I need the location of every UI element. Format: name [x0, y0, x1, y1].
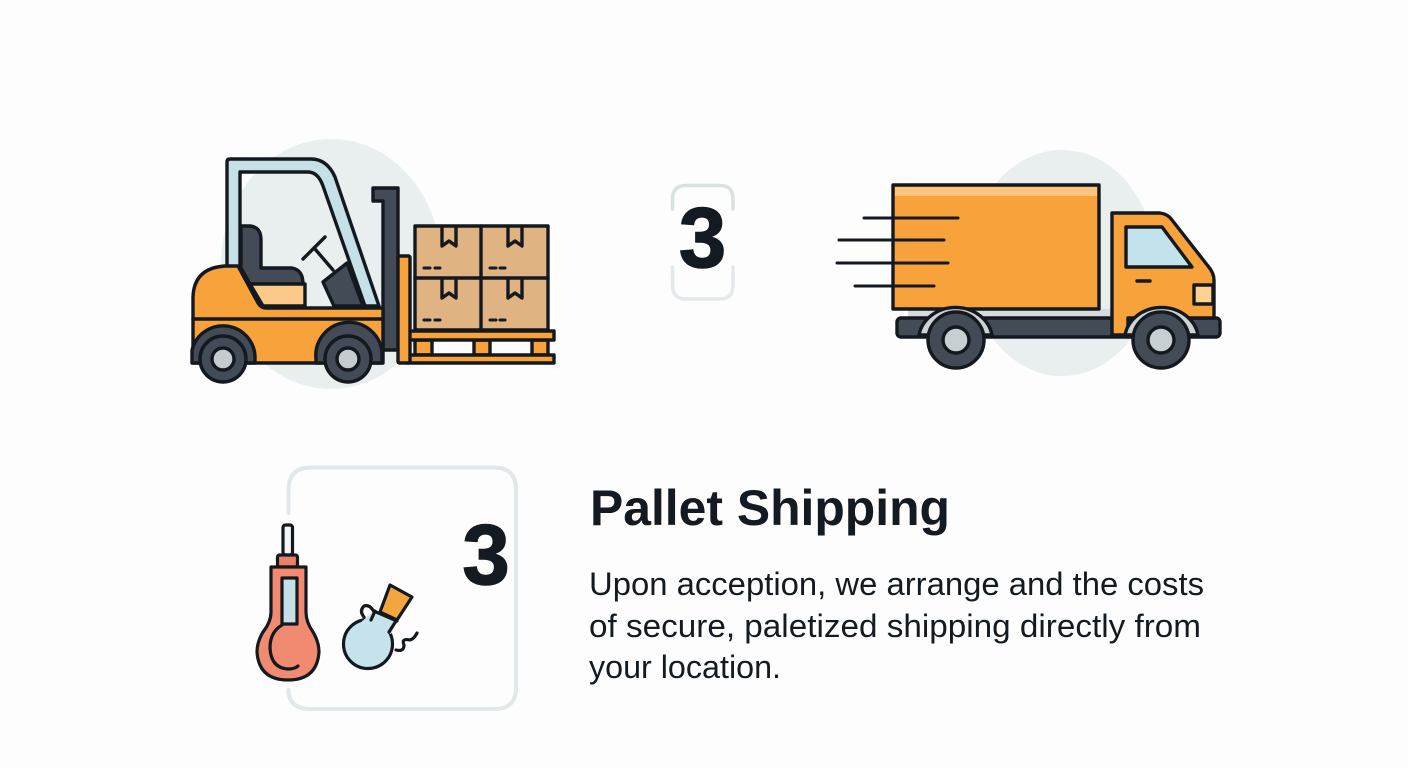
cardboard boxes	[415, 226, 548, 330]
cargo underside	[908, 309, 1112, 319]
panel: outlined number card	[257, 468, 516, 709]
body text	[589, 566, 1204, 685]
truck wheels	[928, 312, 1189, 368]
chassis	[897, 318, 1220, 337]
icon: red bulb tool	[257, 525, 319, 680]
number badge: 3: 3	[679, 191, 726, 286]
front and rear wheels	[200, 336, 371, 382]
cargo box	[893, 185, 1099, 309]
body text: of secure, paletized shipping directly from	[589, 608, 1201, 644]
number badge: 3	[672, 186, 733, 299]
icon: forklift carrying pallet	[192, 139, 554, 389]
speed lines	[837, 218, 958, 286]
mast	[373, 188, 398, 350]
body text: your location.	[589, 649, 781, 685]
body text: Upon acception, we arrange and the costs	[589, 566, 1204, 602]
cab frame	[227, 159, 379, 306]
rear fender	[919, 307, 992, 335]
card number 3: 3	[462, 508, 510, 603]
icon: round flask with cork	[344, 585, 417, 668]
fork carriage	[398, 256, 410, 363]
seat	[241, 226, 303, 284]
front fender	[1125, 307, 1198, 335]
wheel arches	[192, 326, 255, 363]
steering column and wheel	[303, 237, 363, 306]
pallet	[408, 331, 554, 363]
heading: Pallet Shipping	[590, 480, 950, 536]
forklift body	[193, 266, 383, 363]
icon: delivery truck	[837, 150, 1220, 376]
truck cab	[1112, 213, 1214, 335]
